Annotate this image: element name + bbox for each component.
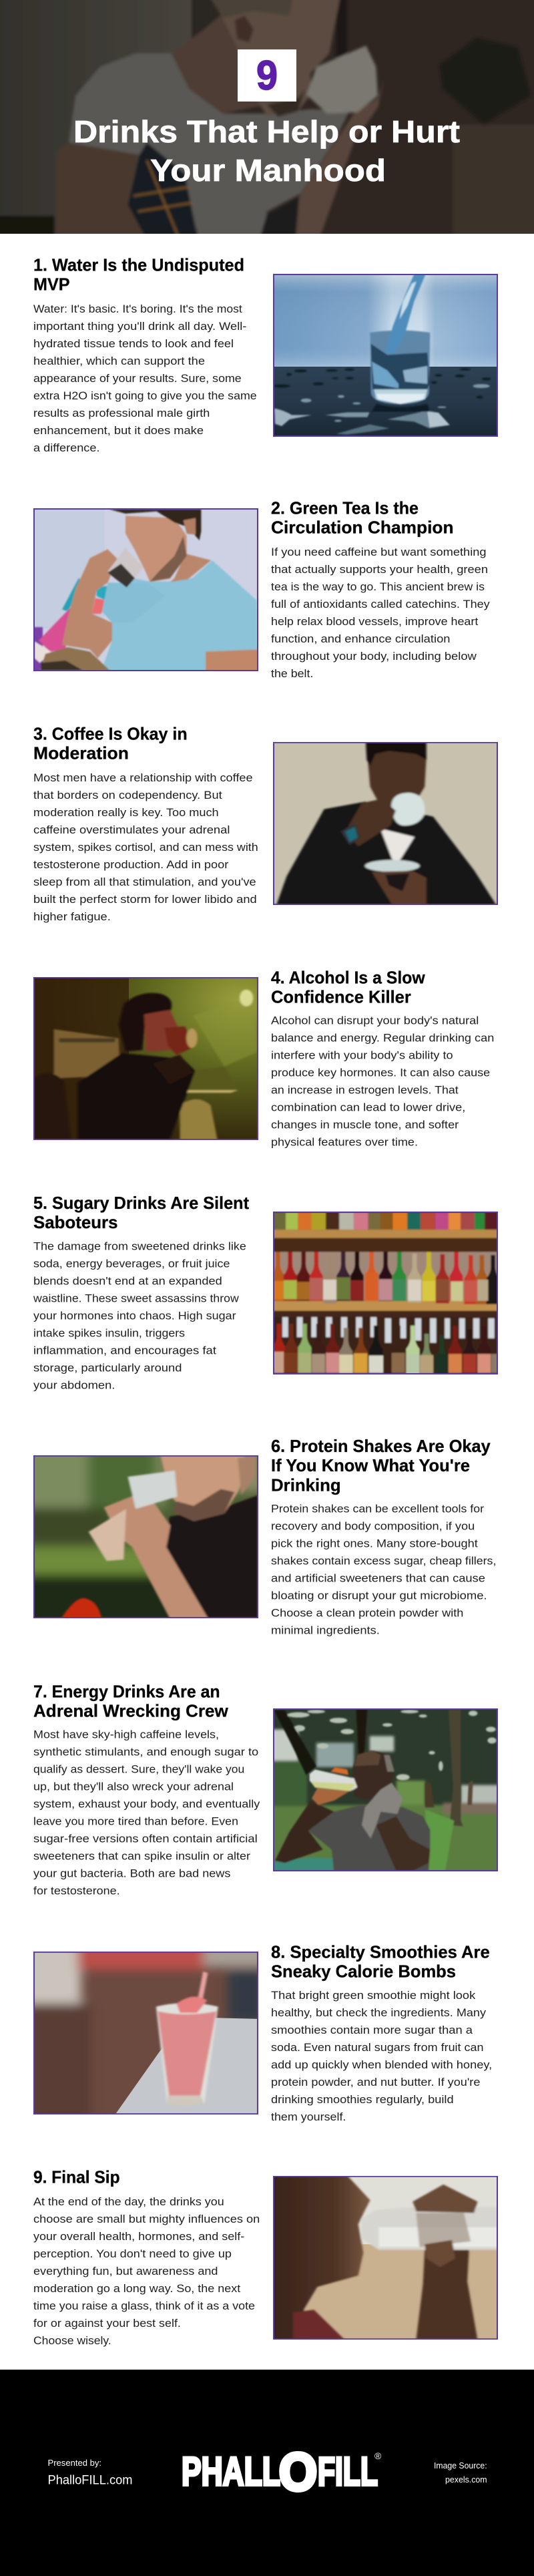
panel: 7 energy drinks (33, 1682, 501, 1897)
body text 7: Most have sky-high caffeine levels, (33, 1728, 219, 1740)
body text 3: caffeine overstimulates your adrenal (33, 823, 230, 836)
body text 4: an increase in estrogen levels. That (271, 1083, 459, 1097)
body text 8: soda. Even natural sugars from fruit can (271, 2041, 483, 2054)
bottom row bottles (272, 1324, 491, 1384)
body text 1: a difference. (33, 441, 100, 454)
photo: man drinking in a dim bar (33, 977, 258, 1140)
body text 3: that borders on codependency. But (33, 789, 222, 801)
photo: man drinking from a bottle in a park (270, 1708, 501, 1876)
body text 9 (33, 2195, 260, 2347)
body text 3: moderation really is key. Too much (33, 806, 219, 819)
body text 6: bloating or disrupt your gut microbiome. (271, 1590, 487, 1602)
title: Your Manhood (150, 153, 386, 188)
body text 4: balance and energy. Regular drinking can (271, 1031, 494, 1045)
body text 3: sleep from all that stimulation, and you've (33, 876, 256, 888)
body text 8 (271, 1989, 492, 2123)
body text 9: everything fun, but awareness and (33, 2265, 218, 2277)
heading 6: Drinking (271, 1475, 341, 1495)
body text 5: soda, energy beverages, or fruit juice (33, 1257, 230, 1270)
title (73, 114, 460, 188)
body text 7: leave you more tired than before. Even (33, 1815, 238, 1827)
logo: PhalloFILL: PHALL (182, 2449, 280, 2494)
body text 7: sweeteners that can spike insulin or alter (33, 1850, 251, 1862)
panel: 6 protein shakes (23, 1436, 496, 1636)
presented by (48, 2458, 132, 2487)
body text 1: hydrated tissue tends to look and feel (33, 337, 234, 350)
bottom row labels (274, 1352, 497, 1373)
heading 9: 9. Final Sip (33, 2167, 120, 2187)
heading 8 (271, 1942, 490, 1981)
heading 7 (33, 1682, 229, 1720)
heading 5: 5. Sugary Drinks Are Silent (33, 1193, 249, 1213)
body text 5: blends doesn't end at an expanded (33, 1274, 222, 1288)
number badge: 9 (256, 53, 278, 99)
panel: 1 water (33, 255, 498, 454)
body text 3: system, spikes cortisol, and can mess with (33, 841, 258, 854)
body text 1 (33, 303, 257, 454)
body text 9: At the end of the day, the drinks you (33, 2195, 224, 2208)
body text 2: that actually supports your health, green (271, 563, 488, 576)
body text 5: inflammation, and encourages fat (33, 1344, 216, 1357)
photo: person drinking from a water bottle (271, 2175, 498, 2341)
middle row labels (274, 1272, 488, 1302)
header photo: man drinking from a white cup (0, 0, 534, 234)
body text 8: them yourself. (271, 2110, 346, 2123)
body text 2: If you need caffeine but want something (271, 546, 487, 558)
body text 9: Choose wisely. (33, 2334, 111, 2347)
body text 2: tea is the way to go. This ancient brew is (271, 580, 485, 593)
body text 7: qualify as dessert. Sure, they'll wake you (33, 1763, 244, 1775)
heading 2 (271, 498, 454, 537)
body text 1: important thing you'll drink all day. Well- (33, 320, 246, 333)
body text 1: Water: It's basic. It's boring. It's the most (33, 303, 242, 315)
photo: shelves of soda bottles (271, 1212, 500, 1384)
body text 4: Alcohol can disrupt your body's natural (271, 1014, 479, 1027)
number badge (238, 49, 296, 102)
body text 7 (33, 1728, 260, 1897)
photo: man drinking from a shaker (23, 1446, 265, 1627)
body text 8: smoothies contain more sugar than a (271, 2024, 473, 2036)
heading 4: Confidence Killer (271, 987, 411, 1007)
image source: Image Source: (434, 2461, 487, 2470)
panel: 3 coffee (33, 724, 498, 923)
body text 1: healthier, which can support the (33, 355, 205, 367)
body text 4: changes in muscle tone, and softer (271, 1118, 459, 1131)
body text 9: perception. You don't need to give up (33, 2247, 232, 2260)
photo: water poured into a glass (273, 274, 498, 437)
logo: PhalloFILL: ® (374, 2450, 382, 2461)
body text 7: system, exhaust your body, and eventually (33, 1798, 260, 1810)
heading 7: 7. Energy Drinks Are an (33, 1682, 220, 1702)
heading 2: Circulation Champion (271, 517, 454, 537)
header banner (0, 0, 534, 240)
heading 8: Sneaky Calorie Bombs (271, 1961, 456, 1981)
body text 6: Choose a clean protein powder with (271, 1607, 463, 1619)
presented by: PhalloFILL.com (48, 2474, 132, 2487)
logo: PhalloFILL: O (279, 2442, 317, 2501)
body text 7: for testosterone. (33, 1885, 120, 1897)
body text 2: function, and enhance circulation (271, 632, 450, 645)
body text 5: your abdomen. (33, 1378, 115, 1392)
body text 5 (33, 1240, 246, 1392)
body text 7: up, but they'll also wreck your adrenal (33, 1781, 234, 1793)
body text 3: Most men have a relationship with coffee (33, 771, 253, 784)
body text 4: combination can lead to lower drive, (271, 1101, 465, 1114)
logo: PhalloFILL: FILL (318, 2449, 378, 2494)
heading 6: If You Know What You're (271, 1455, 470, 1475)
body text 5: The damage from sweetened drinks like (33, 1240, 246, 1253)
body text 2: help relax blood vessels, improve heart (271, 615, 479, 628)
heading 5 (33, 1193, 249, 1232)
body text 9: moderation go a long way. So, the next (33, 2282, 241, 2295)
body text 7: sugar-free versions often contain artificial (33, 1833, 258, 1845)
body text 6: minimal ingredients. (271, 1624, 380, 1636)
title: Drinks That Help or Hurt (73, 114, 460, 149)
body text 6: Protein shakes can be excellent tools for (271, 1503, 485, 1515)
body text 4 (271, 1014, 494, 1149)
body text 7: synthetic stimulants, and enough sugar to (33, 1746, 258, 1758)
heading 1: MVP (33, 274, 70, 294)
body text 7: your gut bacteria. Both are bad news (33, 1867, 230, 1879)
cans row (274, 1212, 498, 1230)
heading 2: 2. Green Tea Is the (271, 498, 419, 518)
body text 6: pick the right ones. Many store-bought (271, 1537, 478, 1549)
body text 3: built the perfect storm for lower libido and (33, 893, 257, 906)
heading 1: 1. Water Is the Undisputed (33, 255, 244, 275)
body text 2: the belt. (271, 667, 313, 680)
heading 4 (271, 967, 425, 1007)
body text 2 (271, 546, 490, 680)
body text 6: recovery and body composition, if you (271, 1520, 475, 1532)
body text 8: add up quickly when blended with honey, (271, 2058, 492, 2071)
body text 6: shakes contain excess sugar, cheap fillers, (271, 1555, 496, 1567)
photo: pink smoothie on a table (23, 1942, 268, 2126)
body text 9: time you raise a glass, think of it as a vote (33, 2299, 255, 2312)
body text 1: enhancement, but it does make (33, 424, 204, 437)
image source (434, 2461, 487, 2485)
heading 5: Saboteurs (33, 1212, 117, 1232)
body text 9: choose are small but mighty influences on (33, 2213, 260, 2225)
body text 1: extra H2O isn't going to give you the same (33, 389, 257, 402)
body text 1: appearance of your results. Sure, some (33, 372, 242, 385)
body text 9: your overall health, hormones, and self- (33, 2230, 244, 2243)
body text 1: results as professional male girth (33, 407, 210, 419)
body text 4: physical features over time. (271, 1135, 418, 1149)
presented by: Presented by: (48, 2458, 101, 2468)
heading 4: 4. Alcohol Is a Slow (271, 967, 425, 987)
body text 3: testosterone production. Add in poor (33, 858, 229, 871)
panel: 5 sugary drinks (33, 1193, 500, 1392)
heading 6 (271, 1436, 491, 1495)
body text 4: interfere with your body's ability to (271, 1049, 453, 1062)
footer (0, 2370, 534, 2576)
logo: PhalloFILL (182, 2442, 382, 2501)
body text 3: higher fatigue. (33, 910, 111, 923)
image source: pexels.com (445, 2475, 487, 2485)
body text 8: That bright green smoothie might look (271, 1989, 476, 2002)
body text 8: healthy, but check the ingredients. Many (271, 2006, 487, 2019)
heading 1 (33, 255, 244, 294)
body text 5: your hormones into chaos. High sugar (33, 1309, 236, 1322)
body text 6: and artificial sweeteners that can cause (271, 1572, 485, 1584)
body text 3 (33, 771, 258, 923)
heading 7: Adrenal Wrecking Crew (33, 1700, 229, 1720)
heading 3: Moderation (33, 743, 129, 763)
panel: 8 smoothies (23, 1942, 492, 2126)
heading 6: 6. Protein Shakes Are Okay (271, 1436, 491, 1456)
panel: 9 final sip (33, 2167, 498, 2347)
heading 3 (33, 724, 188, 763)
heading 3: 3. Coffee Is Okay in (33, 724, 188, 744)
middle row bottles (271, 1252, 500, 1304)
body text 2: full of antioxidants called catechins. They (271, 598, 490, 610)
body text 8: drinking smoothies regularly, build (271, 2093, 454, 2106)
panel: 2 green tea (33, 498, 490, 680)
photo: man in blazer with coffee cup (273, 742, 498, 905)
body text 9: for or against your best self. (33, 2317, 181, 2330)
body text 5: storage, particularly around (33, 1361, 182, 1374)
body text 4: produce key hormones. It can also cause (271, 1066, 490, 1079)
heading 8: 8. Specialty Smoothies Are (271, 1942, 490, 1962)
body text 6 (271, 1503, 496, 1636)
body text 8: protein powder, and nut butter. If you're (271, 2076, 480, 2088)
body text 2: throughout your body, including below (271, 650, 477, 663)
body text 5: waistline. These sweet assassins throw (33, 1292, 240, 1305)
body text 5: intake spikes insulin, triggers (33, 1326, 185, 1340)
photo: man sipping tea (33, 508, 258, 672)
panel: 4 alcohol (33, 967, 494, 1149)
